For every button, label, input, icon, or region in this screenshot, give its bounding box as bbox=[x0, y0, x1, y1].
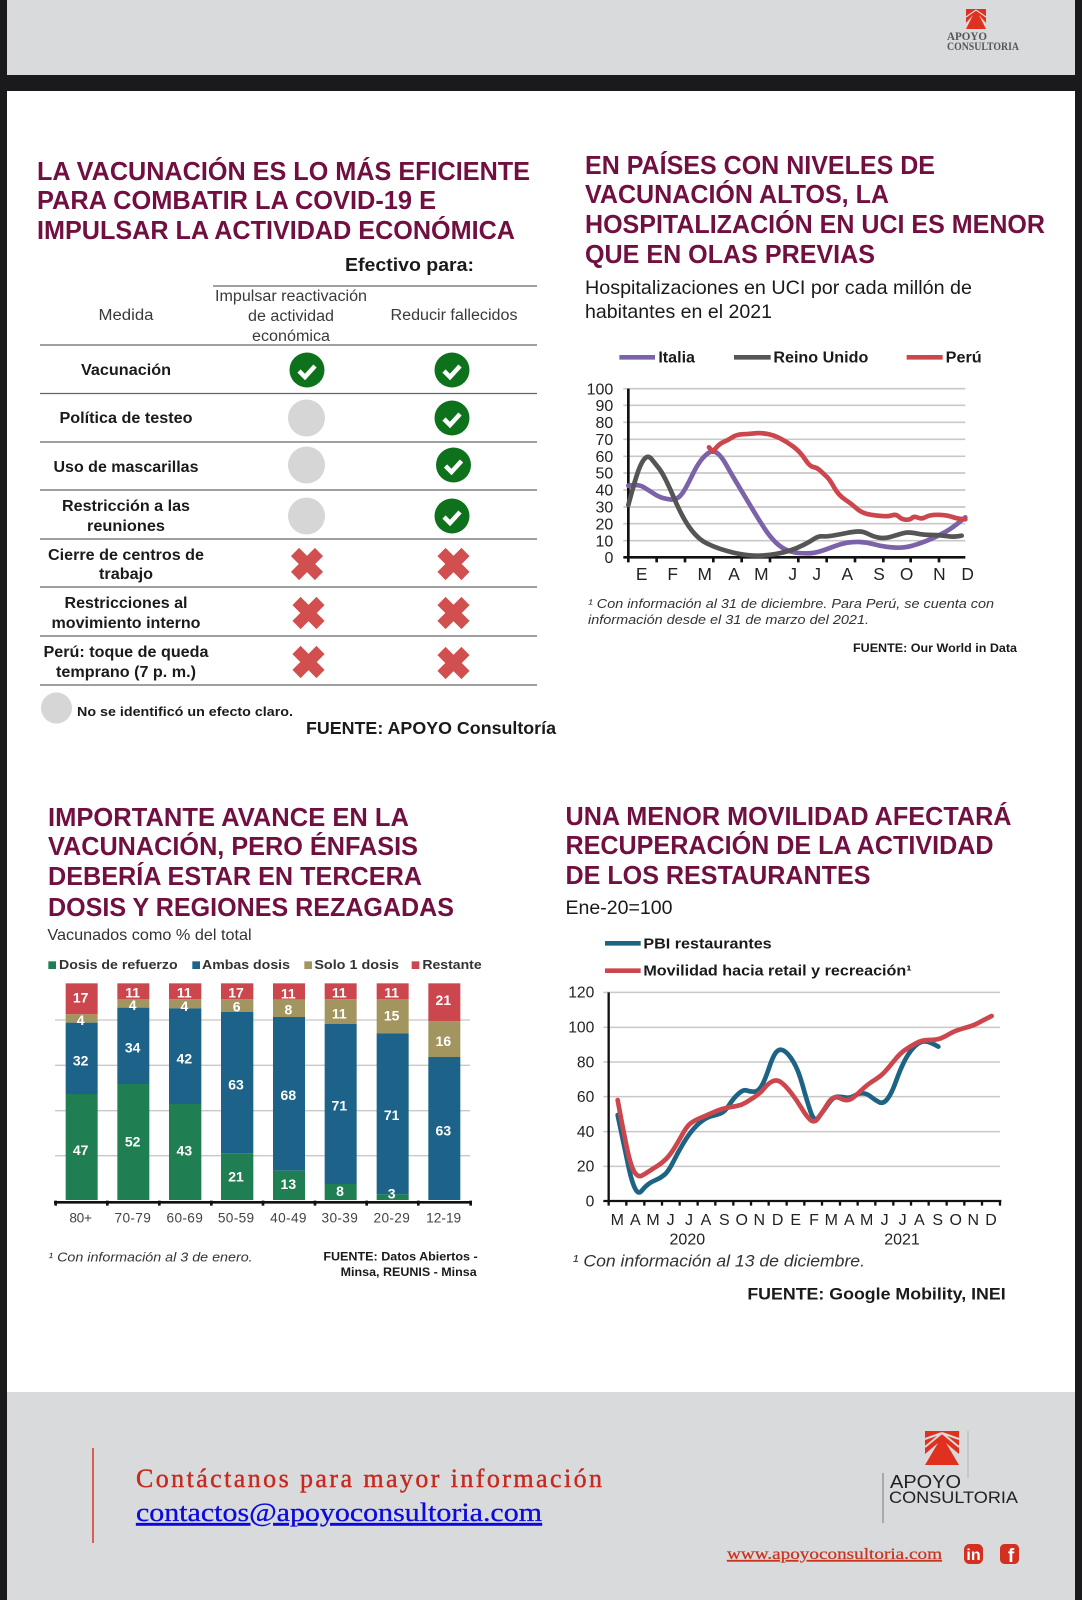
row labels: Política de testeo bbox=[60, 410, 192, 427]
heading: mobility bbox=[566, 801, 1012, 890]
series: Reino Unido bbox=[628, 457, 962, 556]
bar: 50-59: 17 bbox=[228, 985, 244, 1001]
top gray banner bbox=[7, 0, 1075, 75]
y axis labels: 20 bbox=[596, 516, 613, 533]
month labels: J bbox=[812, 564, 821, 584]
month and year labels: O bbox=[949, 1212, 962, 1229]
row labels: Restricción a las bbox=[62, 498, 190, 515]
icon: LinkedIn: in bbox=[966, 1547, 981, 1564]
month and year labels: J bbox=[899, 1212, 907, 1229]
bar: 70-79: 11 bbox=[125, 985, 140, 1001]
icon: LinkedIn bbox=[964, 1544, 983, 1564]
y axis labels bbox=[587, 381, 613, 567]
heading: vaccination: LA VACUNACIÓN ES LO MÁS EFICIENTE bbox=[37, 156, 530, 186]
heading: mobility: DE LOS RESTAURANTES bbox=[566, 860, 870, 890]
y axis labels: 0 bbox=[586, 1193, 595, 1210]
row labels: reuniones bbox=[87, 518, 165, 535]
bar: 50-59 bbox=[221, 983, 253, 1200]
bar: 60-69: 4 bbox=[180, 998, 188, 1014]
panel: ICU hospitalizations bbox=[585, 150, 1045, 655]
table header: Medida bbox=[98, 307, 154, 324]
legend: doses: Solo 1 dosis bbox=[314, 958, 399, 972]
y axis labels: 10 bbox=[596, 533, 613, 550]
source: Datos Abiertos bbox=[323, 1251, 478, 1279]
month and year labels: M bbox=[611, 1212, 624, 1229]
legend: mobility: PBI restaurantes bbox=[643, 936, 772, 952]
month labels: A bbox=[728, 564, 740, 584]
month and year labels: A bbox=[914, 1212, 925, 1229]
icon: top logo: APOYO bbox=[947, 29, 987, 43]
month and year labels: F bbox=[809, 1212, 819, 1229]
source: Google Mobility: FUENTE: Google Mobility, INEI bbox=[747, 1284, 1006, 1303]
icon: Facebook bbox=[1000, 1544, 1019, 1567]
month and year labels: M bbox=[646, 1212, 660, 1229]
subtitle: ICU: habitantes en el 2021 bbox=[585, 301, 772, 323]
series: Italia bbox=[628, 451, 965, 553]
bar: 20-29: 15 bbox=[384, 1008, 400, 1024]
month and year labels bbox=[611, 1212, 997, 1249]
bar: 30-39: 11 bbox=[332, 1005, 347, 1021]
series: Movilidad bbox=[618, 1016, 992, 1176]
y axis labels bbox=[568, 985, 595, 1210]
row labels: movimiento interno bbox=[52, 615, 200, 632]
bar: 50-59: 63 bbox=[228, 1077, 244, 1093]
y axis labels: 40 bbox=[577, 1124, 595, 1141]
line chart: ICU bbox=[587, 350, 982, 584]
icon: footer logo: CONSULTORIA bbox=[889, 1489, 1018, 1507]
table header bbox=[98, 254, 537, 345]
icon: footer logo: APOYO bbox=[890, 1472, 961, 1492]
category labels: 40-49 bbox=[270, 1211, 306, 1226]
icon: top logo bbox=[947, 9, 1019, 53]
month labels: O bbox=[900, 564, 913, 584]
series: PBI restaurantes bbox=[618, 1041, 938, 1192]
heading: vaccination: IMPULSAR LA ACTIVIDAD ECONÓMICA bbox=[37, 215, 515, 245]
table header: Reducir fallecidos bbox=[390, 307, 518, 324]
y axis labels: 60 bbox=[596, 449, 613, 466]
legend: mobility: Movilidad hacia retail y recreación¹ bbox=[643, 964, 912, 980]
category labels: 60-69 bbox=[166, 1211, 203, 1226]
month labels: N bbox=[933, 564, 946, 584]
y axis labels: 80 bbox=[596, 415, 613, 432]
bar: 20-29: 3 bbox=[388, 1186, 396, 1202]
source: Datos Abiertos: Minsa, REUNIS - Minsa bbox=[341, 1266, 477, 1279]
row labels: Perú: toque de queda bbox=[44, 644, 209, 661]
bar: 60-69: 43 bbox=[177, 1143, 192, 1159]
icons: red crosses bbox=[295, 552, 466, 675]
bar: 12-19: 63 bbox=[436, 1123, 451, 1139]
legend: ICU: Reino Unido bbox=[773, 350, 868, 367]
month and year labels: A bbox=[844, 1212, 855, 1229]
month and year labels: N bbox=[968, 1212, 979, 1229]
heading: ICU bbox=[585, 150, 1045, 269]
legend: no clear effect bbox=[41, 692, 293, 724]
y axis labels: 90 bbox=[596, 398, 613, 415]
source: APOYO: FUENTE: APOYO Consultoría bbox=[306, 718, 556, 738]
y axis labels: 70 bbox=[596, 432, 613, 449]
bar: 60-69 bbox=[169, 983, 201, 1200]
subtitle: mobility: Ene-20=100 bbox=[566, 897, 673, 919]
bar: 60-69: 11 bbox=[177, 985, 192, 1001]
bar: 30-39: 11 bbox=[332, 985, 347, 1001]
month labels: M bbox=[697, 564, 712, 584]
category labels: 50-59 bbox=[218, 1211, 254, 1226]
footnote: progress: ¹ Con información al 3 de enero. bbox=[48, 1250, 253, 1265]
legend: ICU: Italia bbox=[658, 350, 695, 367]
y axis labels: 20 bbox=[577, 1159, 595, 1176]
subtitle: progress: Vacunados como % del total bbox=[47, 927, 252, 944]
panel: mobility and restaurants bbox=[566, 801, 1012, 1303]
icons: no clear effect circles bbox=[288, 400, 325, 534]
source: Datos Abiertos: FUENTE: Datos Abiertos - bbox=[323, 1251, 478, 1264]
row labels: Cierre de centros de bbox=[48, 547, 204, 564]
month labels: D bbox=[961, 564, 974, 584]
bar: 30-39 bbox=[325, 983, 357, 1200]
bar: 50-59: 6 bbox=[233, 999, 241, 1015]
month and year labels: S bbox=[719, 1212, 730, 1229]
legend: no clear effect: No se identificó un efecto claro. bbox=[77, 705, 293, 719]
month and year labels: M bbox=[825, 1212, 838, 1229]
contact email: contactos@apoyoconsultoria.com bbox=[136, 1498, 542, 1527]
month and year labels: O bbox=[735, 1212, 748, 1229]
stacked bar chart bbox=[47, 927, 482, 1279]
month and year labels: 2020 bbox=[670, 1232, 705, 1249]
row labels: trabajo bbox=[99, 566, 153, 583]
heading: progress: DEBERÍA ESTAR EN TERCERA bbox=[48, 861, 422, 891]
table header: de actividad bbox=[248, 308, 334, 325]
bar: 70-79: 4 bbox=[129, 997, 137, 1013]
table header: económica bbox=[252, 328, 330, 345]
month and year labels: D bbox=[985, 1212, 997, 1229]
y axis labels: 100 bbox=[568, 1020, 595, 1037]
bar: 80+ bbox=[66, 983, 98, 1200]
y axis labels: 40 bbox=[596, 483, 613, 500]
month labels: J bbox=[788, 564, 797, 584]
row labels: Vacunación bbox=[81, 362, 171, 379]
bar: 20-29 bbox=[377, 983, 409, 1202]
bar: 12-19 bbox=[428, 983, 460, 1200]
series: Perú bbox=[709, 433, 965, 520]
category labels: 30-39 bbox=[321, 1211, 358, 1226]
bar: 30-39: 8 bbox=[336, 1183, 344, 1199]
heading: mobility: UNA MENOR MOVILIDAD AFECTARÁ bbox=[566, 801, 1012, 831]
legend: doses: Dosis de refuerzo bbox=[59, 958, 178, 972]
website link: www.apoyoconsultoria.com bbox=[727, 1546, 942, 1563]
month and year labels: J bbox=[881, 1212, 889, 1229]
month and year labels: J bbox=[685, 1212, 693, 1229]
row labels: Uso de mascarillas bbox=[54, 459, 198, 476]
icon: top logo: CONSULTORIA bbox=[947, 39, 1019, 53]
icon: footer logo bbox=[883, 1431, 1018, 1523]
bar: 40-49 bbox=[273, 983, 305, 1200]
icon: Facebook: f bbox=[1008, 1546, 1015, 1567]
month and year labels: A bbox=[630, 1212, 641, 1229]
row labels: Restricciones al bbox=[64, 595, 188, 612]
month labels: A bbox=[842, 564, 854, 584]
bar: 12-19: 16 bbox=[436, 1033, 451, 1049]
heading: mobility: RECUPERACIÓN DE LA ACTIVIDAD bbox=[566, 830, 994, 860]
table header: Impulsar reactivación bbox=[215, 288, 367, 305]
subtitle: ICU: Hospitalizaciones en UCI por cada millón de bbox=[585, 277, 972, 299]
panel: vaccination progress bbox=[47, 802, 482, 1279]
heading: vaccination: PARA COMBATIR LA COVID-19 E bbox=[37, 185, 436, 215]
category labels: 70-79 bbox=[114, 1211, 151, 1226]
category labels: 12-19 bbox=[426, 1211, 461, 1226]
footnote: ICU: información desde el 31 de marzo del 2021. bbox=[588, 612, 869, 627]
bar: 40-49: 13 bbox=[281, 1176, 296, 1192]
heading: progress: VACUNACIÓN, PERO ÉNFASIS bbox=[48, 831, 418, 861]
footnote: mobility: ¹ Con información al 13 de diciembre. bbox=[573, 1252, 865, 1271]
bar: 70-79: 52 bbox=[125, 1133, 141, 1149]
category labels bbox=[69, 1211, 461, 1226]
y axis labels: 120 bbox=[568, 985, 595, 1002]
heading: vaccination bbox=[37, 156, 530, 245]
month and year labels: J bbox=[667, 1212, 675, 1229]
bar: 40-49: 11 bbox=[281, 985, 296, 1001]
legend: doses: Restante bbox=[422, 958, 482, 972]
bar: 80+: 4 bbox=[77, 1012, 85, 1028]
bar: 30-39: 71 bbox=[332, 1098, 347, 1114]
category labels: 20-29 bbox=[373, 1211, 410, 1226]
footnote: ICU bbox=[588, 596, 994, 627]
y axis labels: 60 bbox=[577, 1089, 595, 1106]
bar: 40-49: 8 bbox=[284, 1001, 292, 1017]
bar: 40-49: 68 bbox=[281, 1087, 296, 1103]
month labels: E bbox=[636, 564, 647, 584]
month and year labels: N bbox=[754, 1212, 765, 1229]
bar: 50-59: 21 bbox=[228, 1169, 244, 1185]
bar: 70-79 bbox=[117, 983, 149, 1200]
source: Our World in Data: FUENTE: Our World in Data bbox=[853, 643, 1018, 655]
row labels: temprano (7 p. m.) bbox=[56, 664, 196, 681]
category labels: 80+ bbox=[69, 1211, 92, 1226]
panel: vaccination effectiveness table bbox=[37, 156, 556, 738]
y axis labels: 80 bbox=[577, 1054, 595, 1071]
line chart: mobility bbox=[568, 936, 1006, 1303]
bar: 20-29: 11 bbox=[384, 985, 399, 1001]
footnote: ICU: ¹ Con información al 31 de diciembre. Para Perú, se cuenta con bbox=[588, 596, 994, 611]
legend: mobility bbox=[605, 936, 912, 980]
contact call to action: Contáctanos para mayor información bbox=[136, 1464, 602, 1493]
heading: ICU: VACUNACIÓN ALTOS, LA bbox=[585, 179, 889, 209]
month and year labels: D bbox=[772, 1212, 783, 1229]
bar: 12-19: 21 bbox=[436, 992, 451, 1008]
bar: 80+: 32 bbox=[73, 1052, 89, 1068]
heading: ICU: EN PAÍSES CON NIVELES DE bbox=[585, 150, 935, 180]
month labels: F bbox=[667, 564, 678, 584]
heading: ICU: HOSPITALIZACIÓN EN UCI ES MENOR bbox=[585, 209, 1045, 239]
footer panel bbox=[7, 1392, 1075, 1600]
month and year labels: A bbox=[701, 1212, 712, 1229]
month and year labels: 2021 bbox=[884, 1232, 920, 1249]
month labels: M bbox=[754, 564, 769, 584]
row labels bbox=[44, 362, 209, 681]
heading: progress: DOSIS Y REGIONES REZAGADAS bbox=[48, 892, 454, 922]
month labels: S bbox=[873, 564, 885, 584]
y axis labels: 0 bbox=[604, 550, 613, 567]
legend: doses bbox=[48, 958, 482, 972]
month and year labels: E bbox=[790, 1212, 801, 1229]
heading: progress bbox=[48, 802, 454, 922]
month and year labels: M bbox=[860, 1212, 873, 1229]
bar: 80+: 47 bbox=[73, 1142, 89, 1158]
bar: 60-69: 42 bbox=[177, 1050, 192, 1066]
icons: check marks bbox=[290, 352, 471, 534]
bar: 70-79: 34 bbox=[125, 1039, 141, 1055]
legend: doses: Ambas dosis bbox=[202, 958, 290, 972]
subtitle: ICU bbox=[585, 277, 972, 323]
table header: Efectivo para: bbox=[345, 254, 474, 275]
y axis labels: 30 bbox=[596, 500, 613, 517]
month and year labels: S bbox=[932, 1212, 943, 1229]
bar: 80+: 17 bbox=[73, 989, 89, 1005]
y axis labels: 50 bbox=[596, 466, 613, 483]
bar: 20-29: 71 bbox=[384, 1107, 400, 1123]
legend: ICU: Perú bbox=[946, 350, 982, 367]
month labels bbox=[636, 564, 974, 584]
heading: ICU: QUE EN OLAS PREVIAS bbox=[585, 239, 875, 269]
y axis labels: 100 bbox=[587, 381, 613, 398]
heading: progress: IMPORTANTE AVANCE EN LA bbox=[48, 802, 409, 832]
legend: ICU bbox=[619, 350, 982, 367]
